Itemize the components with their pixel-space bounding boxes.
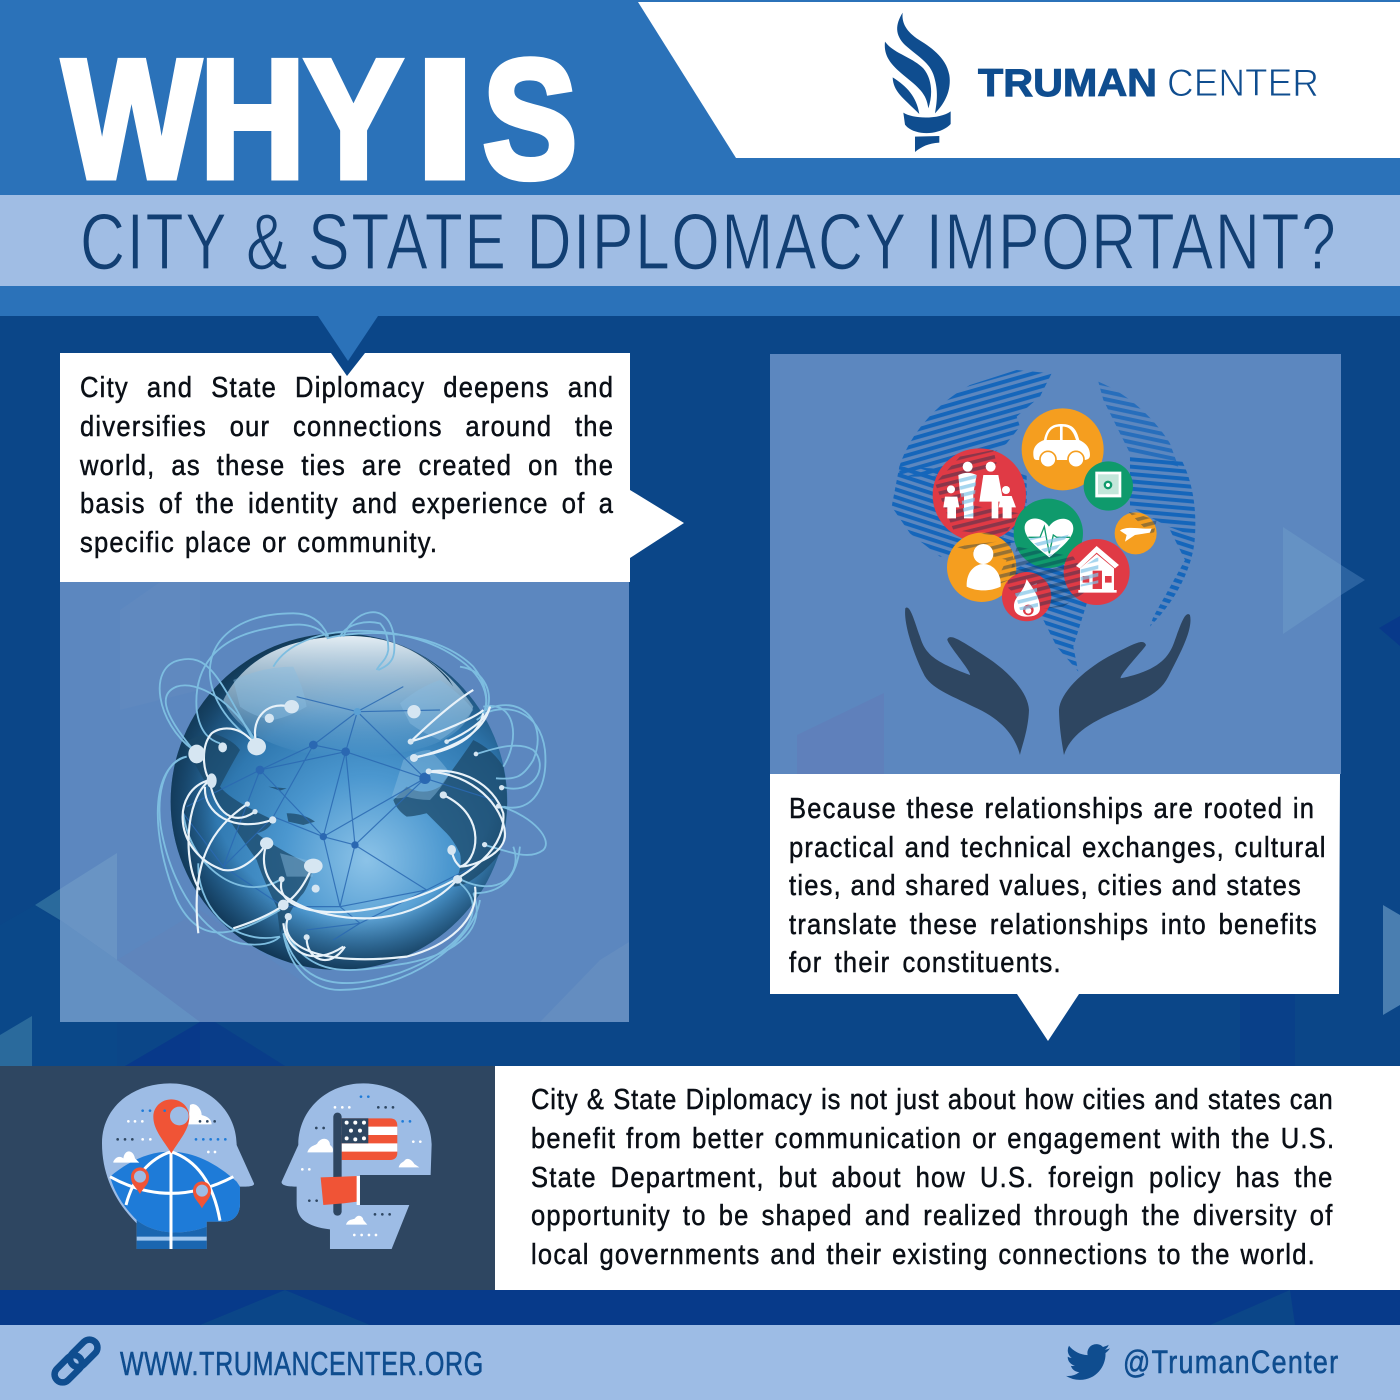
stripes over circles	[935, 450, 1157, 610]
title: WHY IS: S	[483, 25, 577, 213]
panel: bottom left dark with heads	[0, 1066, 495, 1290]
text block: foreign policy	[531, 1084, 1335, 1271]
text block: foreign policy: opportunity to be shaped and realized through the diversity of	[531, 1200, 1334, 1232]
icon: torch	[885, 13, 951, 152]
website: WWW.TRUMANCENTER.ORG	[120, 1346, 483, 1383]
arrow: notch from header	[318, 316, 378, 376]
text block: rooted relationships	[789, 793, 1327, 979]
image: connected globe	[60, 582, 629, 1022]
text block: rooted relationships: translate these relationships into benefits	[789, 909, 1318, 941]
text block: deepens and diversifies	[80, 372, 614, 559]
image: hands holding globe with benefits	[770, 354, 1341, 774]
subtitle band	[0, 195, 1400, 286]
background triangle pattern	[0, 565, 1400, 1325]
text block: rooted relationships: practical and technical exchanges, cultural	[789, 832, 1327, 864]
logo text: TRUMAN	[978, 62, 1157, 105]
text block: rooted relationships: ties, and shared values, cities and states	[789, 870, 1302, 902]
panel: left with globe	[60, 353, 684, 1022]
circles	[1022, 408, 1104, 490]
logo text: CENTER	[1167, 62, 1319, 105]
panel: right with hands and globe	[770, 354, 1341, 1041]
text block: deepens and diversifies: City and State Diplomacy deepens and	[80, 372, 614, 404]
text block: foreign policy: City & State Diplomacy is not just about how cities and states can	[531, 1084, 1334, 1116]
logo text	[978, 62, 1319, 105]
text block: foreign policy: local governments and their existing connections to the world.	[531, 1239, 1316, 1271]
text block: foreign policy: benefit from better communication or engagement with the U.S.	[531, 1123, 1335, 1155]
icon: link	[51, 1336, 101, 1386]
twitter handle: @TrumanCenter	[1123, 1345, 1338, 1381]
nodes	[188, 700, 504, 940]
panel: bottom text	[495, 1066, 1400, 1290]
text block: rooted relationships: for their constituents.	[789, 947, 1062, 979]
title: WHY IS: I	[415, 25, 475, 213]
top header band	[0, 0, 1400, 316]
light arcs	[158, 612, 546, 990]
text block: deepens and diversifies: diversifies our connections around the	[80, 411, 614, 443]
icon: globe head	[102, 1083, 254, 1249]
hands	[905, 608, 1190, 755]
network lines	[183, 687, 493, 940]
text block: foreign policy: State Department, but about how U.S. foreign policy has the	[531, 1162, 1334, 1194]
white arcs	[183, 690, 505, 960]
icons	[943, 424, 1152, 617]
text block: rooted relationships: Because these relationships are rooted in	[789, 793, 1315, 825]
subtitle: CITY & STATE DIPLOMACY IMPORTANT?	[80, 198, 1336, 287]
continents	[183, 733, 507, 933]
text block: deepens and diversifies: basis of the identity and experience of a	[80, 488, 614, 520]
title: WHY IS: WHY	[63, 25, 402, 213]
callout: text box	[770, 774, 1340, 1041]
stripes globe	[899, 370, 1052, 477]
icon: twitter bird	[1066, 1344, 1110, 1380]
logo panel: Truman Center	[638, 2, 1400, 158]
icon: flag head	[282, 1083, 432, 1249]
text block: deepens and diversifies: world, as these ties are created on the	[80, 450, 614, 482]
text block: deepens and diversifies: specific place or community.	[80, 527, 438, 559]
callout: text box	[60, 353, 684, 582]
footer	[0, 1325, 1400, 1400]
